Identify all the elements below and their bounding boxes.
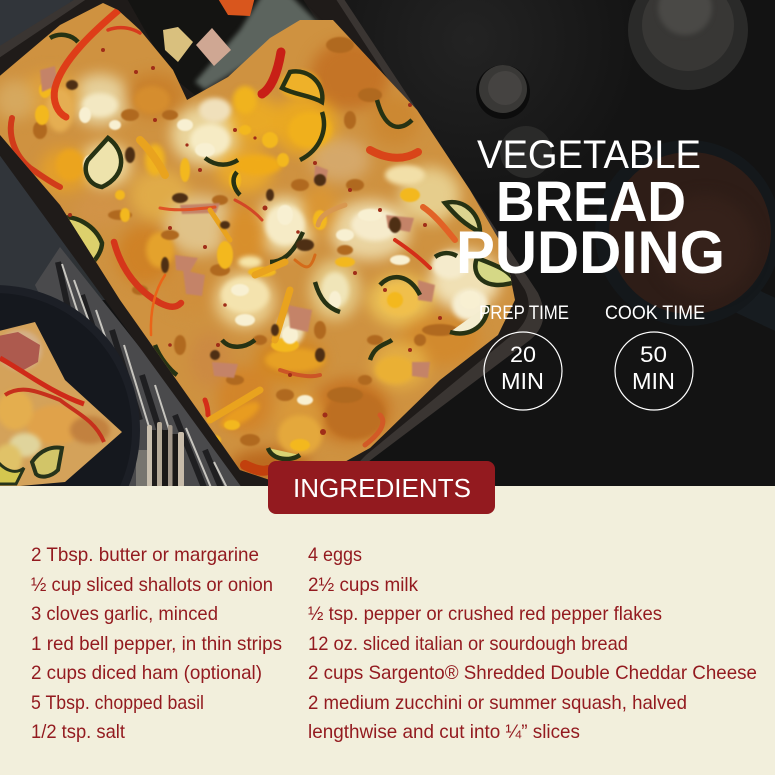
ingredients list: right column: 12 oz. sliced italian or sourdough bread xyxy=(308,633,628,655)
ingredients heading badge xyxy=(268,461,495,514)
ingredients list: left column: 2 Tbsp. butter or margarine xyxy=(31,544,259,566)
icon: pitcher top right xyxy=(628,0,748,90)
title: VEGETABLE xyxy=(477,133,701,177)
ingredients list: right column: 2½ cups milk xyxy=(308,574,418,596)
plate with serving slice xyxy=(0,285,140,486)
baking pan xyxy=(0,0,543,492)
casserole xyxy=(0,0,530,490)
cook time: COOK TIME xyxy=(605,303,705,324)
ingredients list: right column: ½ tsp. pepper or crushed red pepper flakes xyxy=(308,603,662,625)
ingredients list: left column: ½ cup sliced shallots or onion xyxy=(31,574,273,596)
table background xyxy=(0,0,775,486)
cheese highlights xyxy=(46,71,488,455)
ingredients list: right column: 2 cups Sargento® Shredded Double Cheddar Cheese xyxy=(308,662,757,684)
empty pan corner xyxy=(125,0,320,95)
title xyxy=(456,133,725,286)
ingredients list: left column: 1 red bell pepper, in thin strips xyxy=(31,633,282,655)
prep time xyxy=(479,303,569,410)
ingredients list: right column: 4 eggs xyxy=(308,544,362,566)
ingredients list: left column: 3 cloves garlic, minced xyxy=(31,603,218,625)
orange cheddar strips xyxy=(140,140,345,420)
ingredients list: right column: 2 medium zucchini or summer squash, halved xyxy=(308,692,687,714)
striped towel xyxy=(35,247,250,490)
title: PUDDING xyxy=(456,219,725,286)
chili flakes xyxy=(68,48,442,435)
photo: casserole on dark table xyxy=(0,0,775,486)
ingredients list: left column xyxy=(31,544,282,743)
bread slice xyxy=(0,322,122,486)
ingredients list: left column: 2 cups diced ham (optional) xyxy=(31,662,262,684)
red peppers xyxy=(11,9,455,471)
ingredients list: right column: lengthwise and cut into ¼” slices xyxy=(308,721,580,743)
ingredients list: left column: 5 Tbsp. chopped basil xyxy=(31,692,204,714)
cook time xyxy=(605,303,705,410)
browned shadows xyxy=(66,80,401,362)
icon: ramekin of sauce xyxy=(609,152,775,330)
title: BREAD xyxy=(496,170,686,234)
icon: pepper shaker xyxy=(476,65,552,178)
cheese base colour xyxy=(0,40,500,481)
zucchini slices xyxy=(50,20,515,459)
ingredients list: right column xyxy=(308,544,757,743)
ingredients background panel xyxy=(0,486,775,775)
prep time: MIN xyxy=(501,368,544,394)
crust texture xyxy=(33,37,480,451)
ingredients list: left column: 1/2 tsp. salt xyxy=(31,721,126,743)
prep time: PREP TIME xyxy=(479,303,569,324)
cook time: 50 xyxy=(640,342,667,367)
cook time: MIN xyxy=(632,368,675,394)
icon: fork xyxy=(136,422,184,487)
ingredients heading badge: INGREDIENTS xyxy=(293,473,471,503)
prep time: 20 xyxy=(510,342,536,367)
